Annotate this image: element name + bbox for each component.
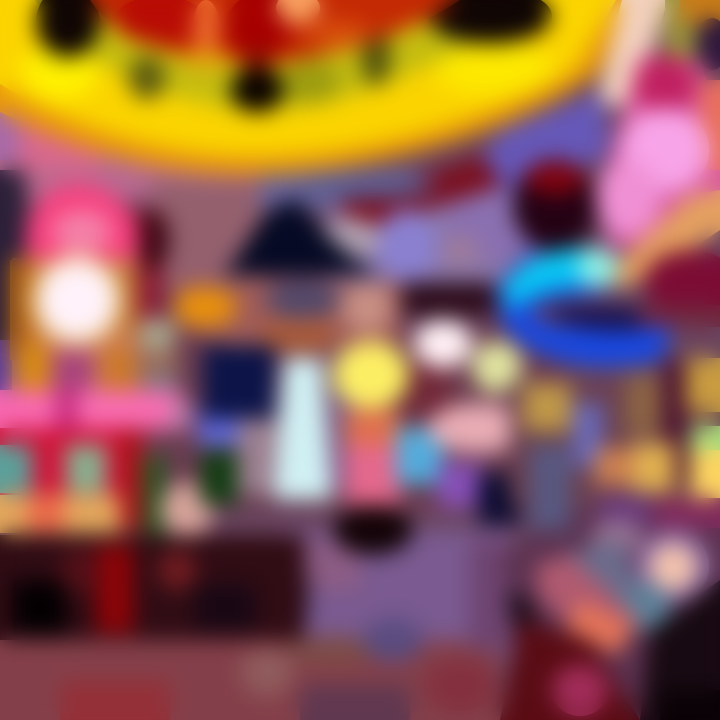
row of dark red stools — [0, 535, 305, 640]
right slot machine row — [500, 358, 720, 720]
left clock tower — [0, 170, 178, 400]
ceiling beams and lavender panel — [297, 92, 610, 281]
central colourful game machines — [333, 320, 528, 555]
pink hanging decoration — [513, 55, 720, 290]
left slot machine bank — [0, 385, 278, 540]
top right corner fixtures — [596, 0, 720, 105]
central figure with hat — [173, 200, 495, 500]
ceiling sign: yellow neon ring — [0, 0, 628, 175]
blue swirl — [497, 248, 720, 367]
floor — [0, 530, 510, 720]
